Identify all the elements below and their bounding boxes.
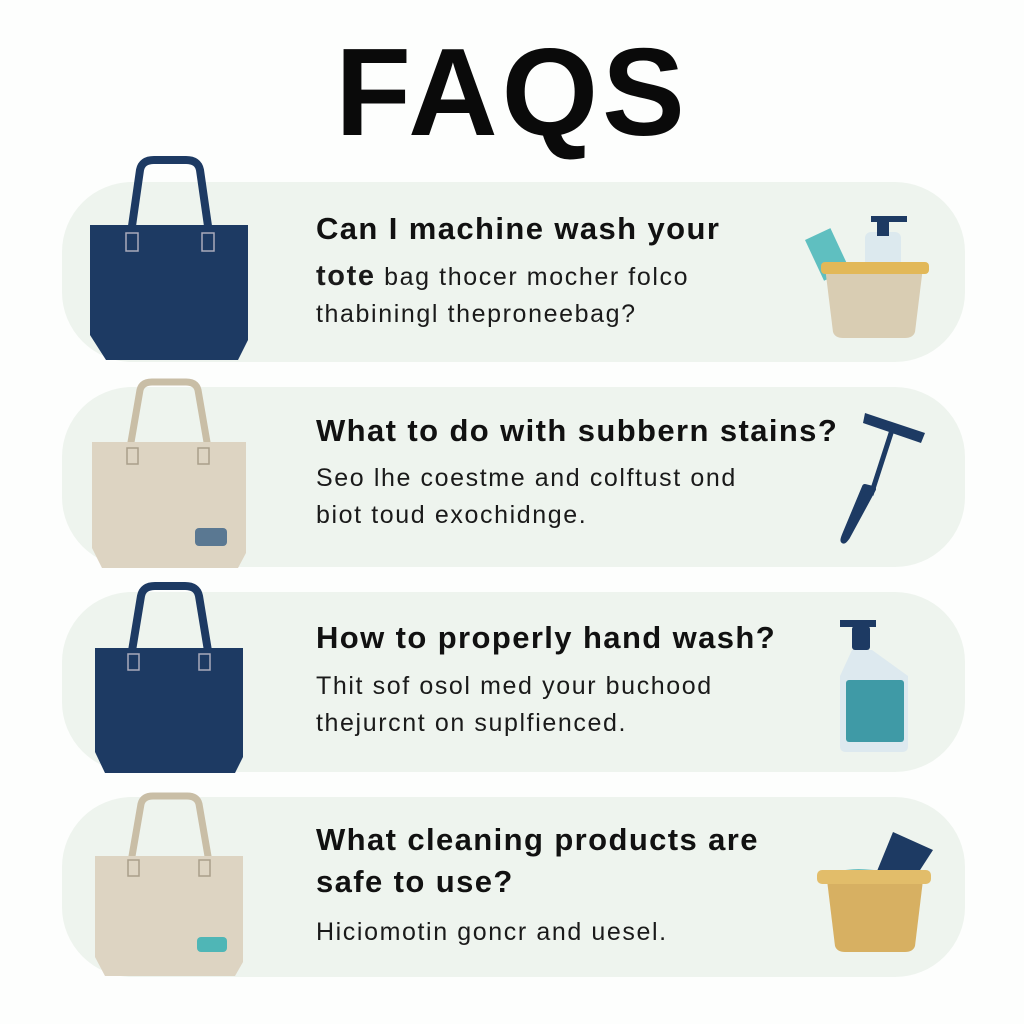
icon: stain tool bbox=[840, 413, 925, 544]
answer 3: thejurcnt on suplfienced. bbox=[316, 709, 627, 737]
answer 3: Thit sof osol med your buchood bbox=[316, 672, 713, 700]
title: FAQS bbox=[335, 24, 689, 162]
question 3: How to properly hand wash? bbox=[316, 620, 776, 655]
icon: soap bottle bbox=[840, 620, 908, 752]
answer 3 bbox=[316, 672, 713, 737]
question 1: Can I machine wash your bbox=[316, 211, 720, 246]
answer 2: biot toud exochidnge. bbox=[316, 501, 587, 529]
answer 1: thabiningl theproneebag? bbox=[316, 300, 637, 328]
icon: navy tote bag 1 bbox=[90, 156, 248, 360]
icon: beige tote bag 2 bbox=[92, 378, 246, 568]
panel: products bbox=[62, 797, 965, 977]
icon: navy tote bag 3 bbox=[95, 582, 243, 773]
panel: machine wash bbox=[62, 182, 965, 362]
answer 4: Hiciomotin goncr and uesel. bbox=[316, 918, 668, 946]
answer 2: Seo lhe coestme and colftust ond bbox=[316, 464, 737, 492]
panel: hand wash bbox=[62, 592, 965, 772]
panel: stains bbox=[62, 387, 965, 567]
question 2: What to do with subbern stains? bbox=[316, 413, 838, 448]
icon: beige tote bag 4 bbox=[95, 792, 243, 976]
question 4: What cleaning products are bbox=[316, 822, 759, 857]
icon: bucket with brush bbox=[817, 832, 933, 952]
answer 1 bbox=[316, 260, 689, 328]
question 4: safe to use? bbox=[316, 864, 514, 899]
icon: bucket with bottle bbox=[805, 216, 929, 338]
answer 2 bbox=[316, 464, 737, 529]
question 4 bbox=[316, 822, 759, 899]
answer 1: tote bag thocer mocher folco bbox=[316, 260, 689, 292]
